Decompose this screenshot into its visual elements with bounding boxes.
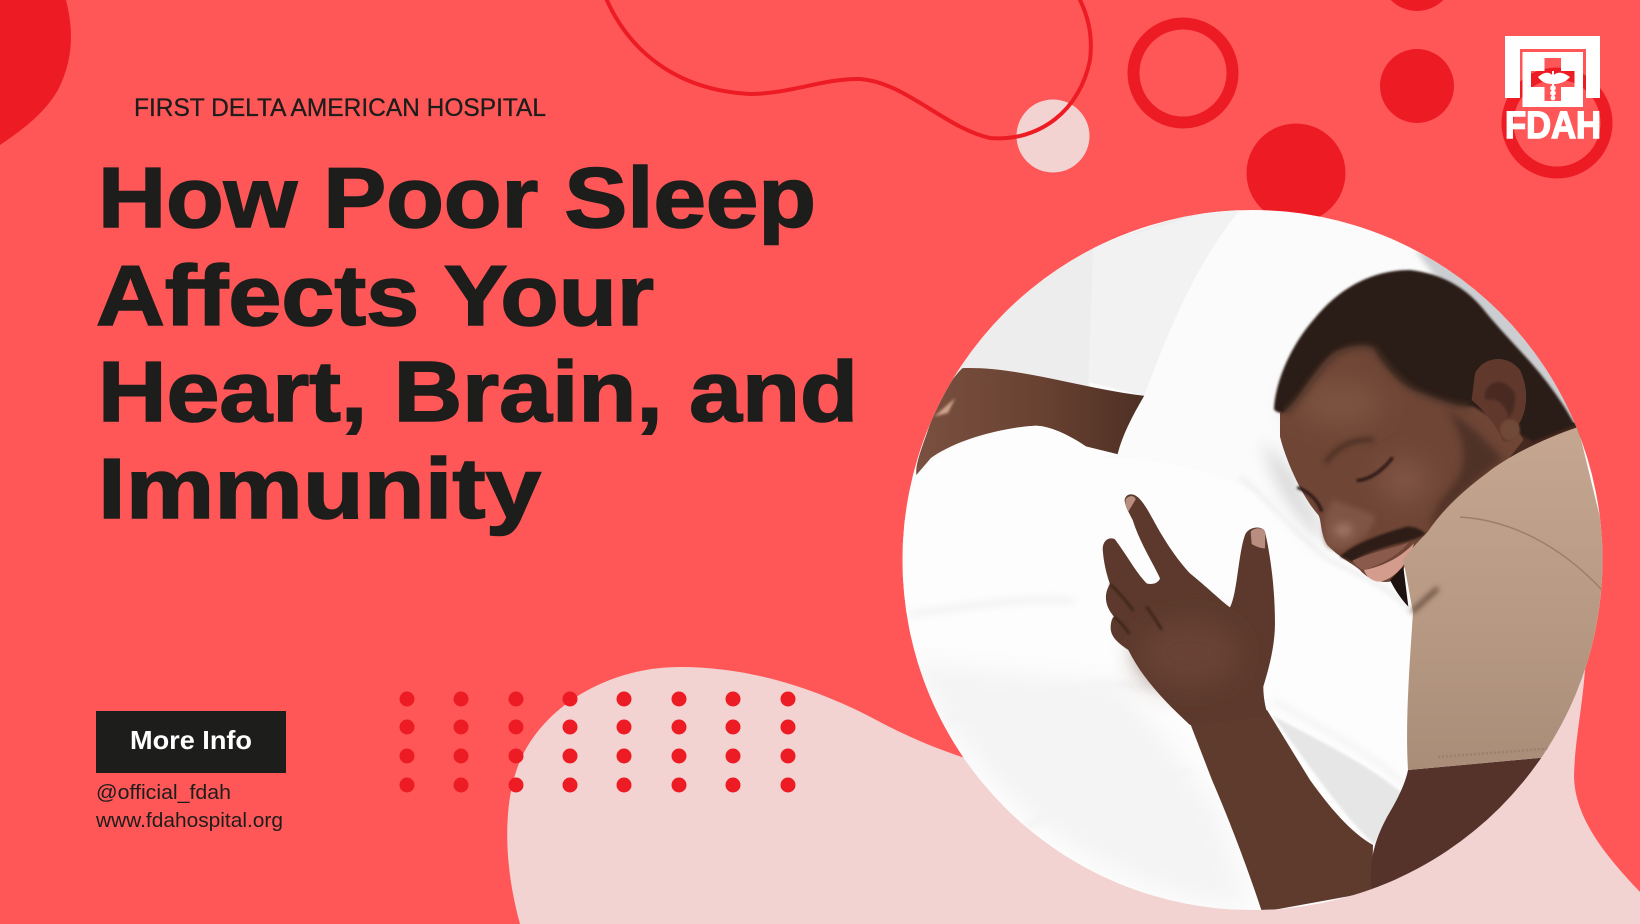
upper arm below sleeve — [1371, 758, 1542, 890]
bedding layers — [880, 200, 1413, 909]
head — [1274, 270, 1583, 607]
face skin — [1280, 344, 1524, 582]
icon: caduceus — [1538, 71, 1570, 100]
lower lip — [1364, 543, 1414, 582]
cheek highlight — [1383, 462, 1424, 498]
dot grid — [400, 692, 796, 792]
closed eye lashes — [1357, 457, 1393, 481]
social handle: @official_fdah — [96, 782, 231, 804]
bedding base — [890, 200, 1620, 920]
eyebrow — [1325, 440, 1373, 463]
moustache — [1340, 527, 1425, 562]
far arm — [916, 368, 1144, 475]
grey wall shadow behind head — [1416, 251, 1578, 432]
hair — [1274, 270, 1575, 442]
index fingernail — [1125, 496, 1136, 512]
title: Immunity — [98, 442, 541, 537]
shade under pillow beside wrist — [1273, 716, 1404, 845]
comforter top edge — [902, 426, 1231, 910]
decorative circle: pale — [1016, 100, 1090, 172]
shirt sleeve seam — [1460, 517, 1602, 590]
decorative curve — [605, 0, 1091, 138]
hand with fingers — [1103, 494, 1275, 725]
logo wordmark: FDAH — [1505, 105, 1601, 147]
title: Affects Your — [96, 249, 654, 344]
logo: FDAH — [1505, 36, 1601, 147]
title: How Poor Sleep — [98, 151, 816, 246]
decorative ring behind logo — [1508, 74, 1606, 172]
finger separation lines — [1110, 584, 1162, 634]
ear lobe — [1500, 419, 1520, 441]
hairline fade — [1285, 347, 1470, 413]
button: More Info — [96, 711, 286, 773]
nose highlight — [1334, 523, 1353, 537]
nose — [1324, 500, 1375, 549]
back sheet, light grey — [954, 212, 1214, 386]
ear — [1472, 359, 1526, 442]
pillow shadow beside face — [1263, 446, 1322, 539]
decorative blob: top left — [0, 0, 71, 145]
title: Heart, Brain, and — [98, 345, 858, 440]
tan t-shirt — [1403, 427, 1620, 770]
title — [96, 151, 858, 537]
ear inner fold — [1485, 382, 1515, 418]
organisation name: FIRST DELTA AMERICAN HOSPITAL — [134, 94, 546, 122]
forehead highlight — [1279, 385, 1372, 422]
logo frame — [1505, 36, 1600, 98]
comforter soft folds — [909, 600, 1190, 827]
beard shading — [1430, 410, 1503, 530]
upper lip — [1353, 543, 1408, 570]
pink blob — [507, 667, 1640, 924]
logo inner plate with cross cut-out — [1522, 52, 1583, 107]
far arm fingertip highlight — [934, 398, 955, 417]
forearm — [1190, 710, 1373, 912]
decorative circle: middle — [1380, 49, 1454, 123]
thumb nail — [1251, 528, 1265, 548]
shirt fold shadow — [1412, 588, 1438, 612]
decorative circle: large — [1246, 124, 1346, 222]
website: www.fdahospital.org — [95, 810, 283, 832]
decorative circle: top — [1380, 0, 1454, 11]
photo: man sleeping on a white pillow — [880, 200, 1620, 920]
back of hand highlight — [1140, 620, 1240, 687]
chin shadow — [1390, 567, 1408, 607]
neck behind ear — [1509, 422, 1580, 458]
pillow crease under face — [1256, 492, 1373, 583]
decorative ring — [1134, 24, 1232, 122]
sleeve hem stitching — [1438, 748, 1556, 757]
button: More Info: More Info — [130, 725, 252, 755]
pillow lower fold — [1273, 700, 1406, 785]
far eye — [1297, 487, 1322, 512]
